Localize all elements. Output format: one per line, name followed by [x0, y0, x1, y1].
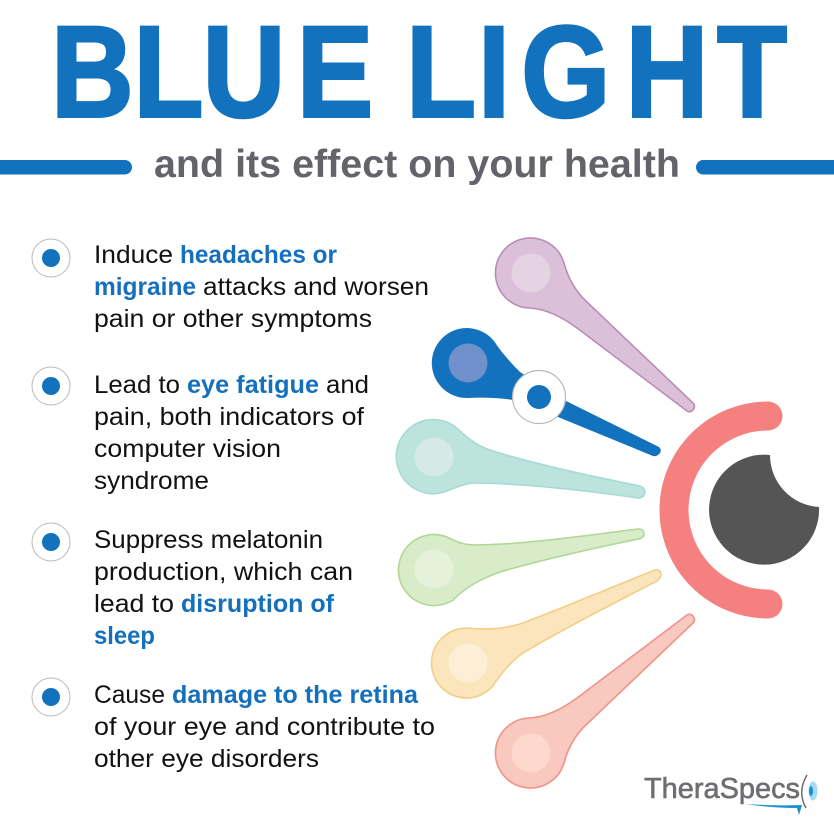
list item: headaches: attacks and worsen — [203, 273, 429, 301]
list item: retina — [32, 678, 435, 773]
list item: retina: of your eye and contribute to — [94, 713, 435, 741]
list item: sleep: disruption of — [181, 590, 335, 618]
list item: headaches: pain or other symptoms — [94, 305, 372, 333]
list item: retina: Cause — [94, 681, 165, 709]
list item: sleep: Suppress melatonin — [94, 526, 323, 554]
list item: headaches: migraine — [94, 273, 196, 301]
list item: eye fatigue — [32, 367, 369, 495]
list item: retina: other eye disorders — [94, 745, 319, 773]
list item: retina: damage to the retina — [172, 681, 419, 709]
list item: eye fatigue: Lead to — [94, 371, 180, 399]
title: BLUE LIGHT — [51, 0, 787, 144]
subtitle with side rules — [0, 143, 834, 186]
ray: purple — [495, 238, 694, 412]
ray: salmon — [495, 614, 694, 788]
list item: eye fatigue: pain, both indicators of — [94, 403, 364, 431]
list item: sleep: production, which can — [94, 558, 353, 586]
list item: headaches: Induce — [94, 241, 173, 269]
logo: TheraSpecs — [644, 773, 818, 815]
icon: eye arc — [674, 416, 768, 604]
list item: sleep — [32, 523, 353, 650]
list item: headaches: headaches or — [180, 241, 337, 269]
icon: eye pupil — [709, 455, 819, 565]
ray: green — [398, 529, 644, 606]
list item: eye fatigue: syndrome — [94, 467, 209, 495]
ray: teal — [396, 420, 645, 498]
ray: blue — [432, 328, 661, 456]
highlight bullet on blue ray — [512, 370, 566, 424]
list item: headaches — [32, 239, 429, 333]
subtitle with side rules: and its effect on your health — [154, 143, 680, 186]
list item: eye fatigue: eye fatigue — [187, 371, 319, 399]
list item: eye fatigue: computer vision — [94, 435, 281, 463]
logo: TheraSpecs: TheraSpecs — [644, 773, 800, 805]
list item: sleep: lead to — [94, 590, 174, 618]
ray: yellow — [432, 570, 661, 698]
list item: sleep: sleep — [94, 622, 155, 650]
list item: eye fatigue: and — [326, 371, 369, 399]
